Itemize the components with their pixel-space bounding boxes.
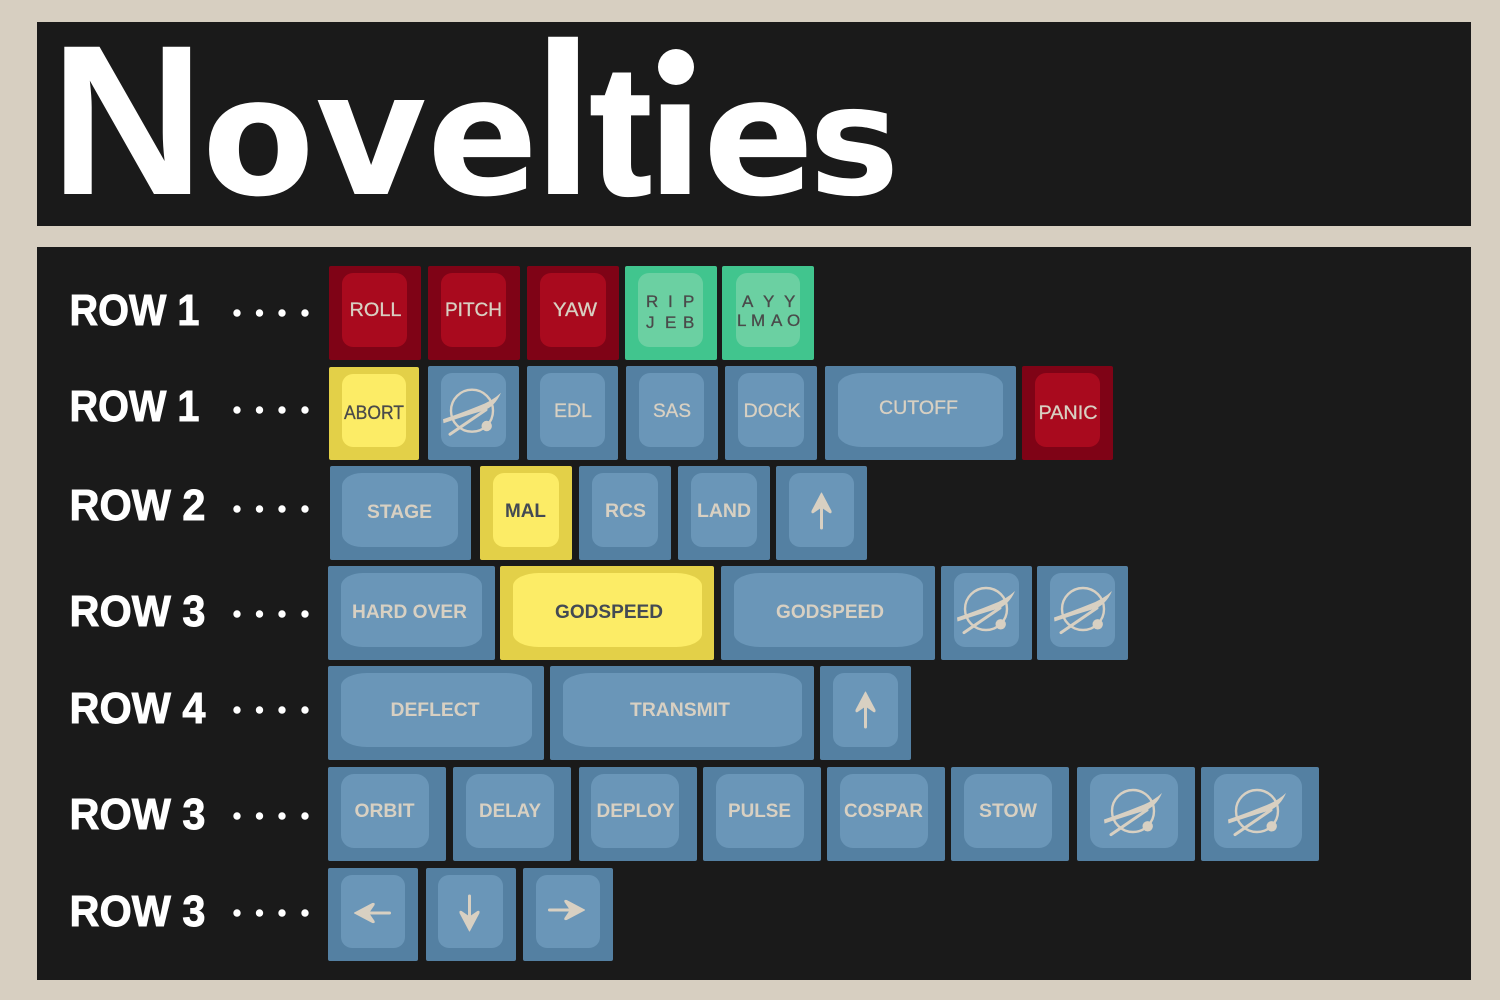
- row label 6: [70, 790, 309, 839]
- key: orbit logo: [1201, 767, 1319, 861]
- key: STOW: STOW: [979, 800, 1038, 822]
- title: s: [809, 53, 899, 230]
- key: LAND: LAND: [697, 500, 751, 522]
- key: RCS: [579, 466, 671, 560]
- key: HARD OVER: [328, 566, 495, 660]
- key: HARD OVER: HARD OVER: [352, 601, 467, 623]
- key: orbit logo: [941, 566, 1032, 660]
- key: DOCK: DOCK: [744, 400, 800, 422]
- key: RCS: RCS: [605, 500, 646, 522]
- title: o: [202, 42, 315, 233]
- key: TRANSMIT: TRANSMIT: [630, 699, 730, 721]
- title: [50, 0, 899, 240]
- key: PULSE: [703, 767, 821, 861]
- key: up arrow: [776, 466, 867, 560]
- row label 5: ROW 4: [70, 684, 206, 733]
- row label 1: [70, 286, 309, 335]
- title: i: [647, 42, 703, 233]
- key: up arrow: [820, 666, 911, 760]
- key: DEPLOY: DEPLOY: [596, 800, 674, 822]
- row label 3: [70, 481, 309, 530]
- key: ROLL: [329, 266, 421, 360]
- key: RIP JEB: [625, 266, 717, 360]
- title: N: [50, 1, 205, 240]
- key: PITCH: [428, 266, 520, 360]
- panel: novelty keys: [37, 247, 1471, 980]
- key: GODSPEED yellow: GODSPEED: [555, 601, 663, 623]
- key: left arrow: [328, 868, 418, 961]
- key: RIP JEB: JEB: [646, 313, 694, 332]
- key: orbit logo: [1077, 767, 1195, 861]
- row label 6: ROW 3: [70, 790, 206, 839]
- key: PITCH: PITCH: [445, 299, 502, 321]
- key: orbit logo: [428, 366, 519, 460]
- key: AYY LMAO: [722, 266, 814, 360]
- key: MAL: MAL: [505, 500, 546, 522]
- title: e: [427, 42, 538, 233]
- title panel: [37, 0, 1471, 240]
- key: DOCK: [725, 366, 817, 460]
- key: EDL: [527, 366, 618, 460]
- key: COSPAR: [827, 767, 945, 861]
- key: YAW: [527, 266, 619, 360]
- key: CUTOFF: [825, 366, 1016, 460]
- key: GODSPEED blue: GODSPEED: [776, 601, 884, 623]
- row label 5: [70, 684, 309, 733]
- key: AYY LMAO: AYY: [742, 292, 795, 311]
- key: STAGE: STAGE: [367, 501, 432, 523]
- title: e: [703, 42, 814, 233]
- title: v: [315, 34, 427, 235]
- row label 4: [70, 587, 309, 636]
- key: COSPAR: COSPAR: [844, 800, 923, 822]
- row label 7: [70, 887, 309, 936]
- key: CUTOFF: CUTOFF: [879, 397, 958, 419]
- row label 4: ROW 3: [70, 587, 206, 636]
- row label 3: ROW 2: [70, 481, 206, 530]
- key: STAGE: [330, 466, 471, 560]
- key: SAS: SAS: [653, 400, 691, 422]
- key: down arrow: [426, 868, 516, 961]
- key: DEFLECT: [328, 666, 544, 760]
- key: ROLL: ROLL: [350, 299, 402, 321]
- key: GODSPEED blue: [721, 566, 935, 660]
- key: ABORT: ABORT: [344, 402, 404, 424]
- title: t: [590, 27, 651, 233]
- key: ORBIT: ORBIT: [354, 800, 415, 822]
- title: l: [533, 0, 593, 240]
- key: PANIC: [1022, 366, 1113, 460]
- key: EDL: EDL: [554, 400, 592, 422]
- key: orbit logo: [1037, 566, 1128, 660]
- key: ABORT: [329, 367, 419, 460]
- key: STOW: [951, 767, 1069, 861]
- key: LAND: [678, 466, 770, 560]
- key: MAL: [480, 466, 572, 560]
- key: PULSE: PULSE: [728, 800, 791, 822]
- row label 7: ROW 3: [70, 887, 206, 936]
- key: RIP JEB: RIP: [646, 292, 694, 311]
- key: PANIC: PANIC: [1038, 402, 1098, 424]
- key: DEFLECT: DEFLECT: [390, 699, 480, 721]
- key: DELAY: [453, 767, 571, 861]
- key: DEPLOY: [579, 767, 697, 861]
- key: DELAY: DELAY: [479, 800, 541, 822]
- row label 2: ROW 1: [70, 382, 200, 431]
- key: TRANSMIT: [550, 666, 814, 760]
- key: GODSPEED yellow: [500, 566, 714, 660]
- key: right arrow: [523, 868, 613, 961]
- key: YAW: YAW: [553, 299, 598, 321]
- key: ORBIT: [328, 767, 446, 861]
- key: SAS: [626, 366, 718, 460]
- key: AYY LMAO: LMAO: [737, 311, 800, 330]
- row label 1: ROW 1: [70, 286, 200, 335]
- row label 2: [70, 382, 309, 431]
